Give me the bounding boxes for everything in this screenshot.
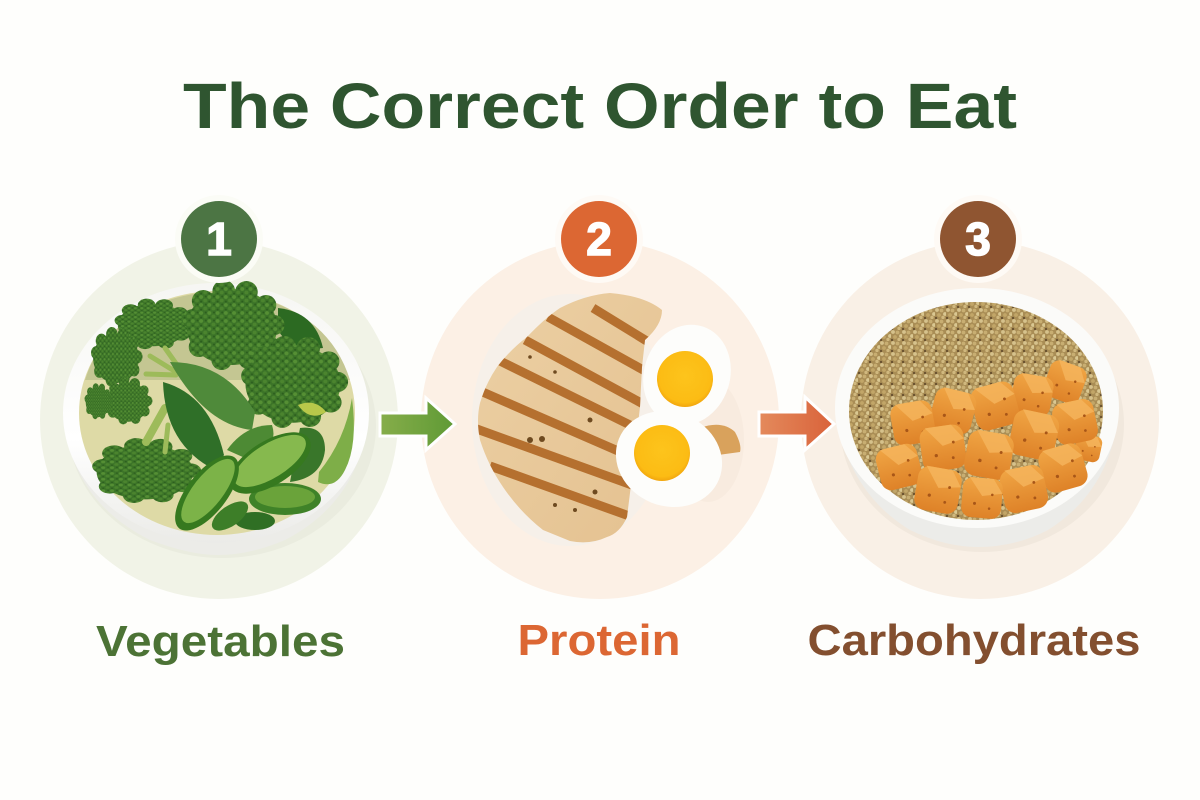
- arrow: vegetables to protein: [380, 398, 455, 450]
- background circle: vegetables: [40, 241, 398, 599]
- panel: protein: [421, 241, 779, 599]
- spinach leaves: [163, 362, 354, 484]
- icon: vegetable bowl: [63, 280, 376, 558]
- icon: boiled eggs: [601, 313, 744, 523]
- badge: 2: 2: [586, 213, 612, 265]
- panel: carbohydrates: [801, 241, 1159, 599]
- title: The Correct Order to Eat: [183, 70, 1017, 142]
- label: protein: Protein: [518, 616, 680, 665]
- label: vegetables: Vegetables: [96, 617, 345, 666]
- badge: 2: [555, 195, 643, 283]
- cucumber slices: [164, 420, 321, 541]
- background circle: carbohydrates: [801, 241, 1159, 599]
- icon: grilled chicken breast: [472, 293, 668, 546]
- background circle: protein: [421, 241, 779, 599]
- badge: 1: 1: [206, 213, 232, 265]
- label: carbohydrates: Carbohydrates: [808, 616, 1140, 665]
- broccoli florets: [85, 280, 348, 503]
- badge: 3: [934, 195, 1022, 283]
- panel: vegetables: [40, 241, 398, 599]
- icon: grain and sweet potato bowl: [835, 288, 1124, 552]
- badge: 1: [175, 195, 263, 283]
- arrow: protein to carbohydrates: [759, 397, 834, 450]
- badge: 3: 3: [965, 213, 991, 265]
- sweet potato cubes: [874, 358, 1103, 520]
